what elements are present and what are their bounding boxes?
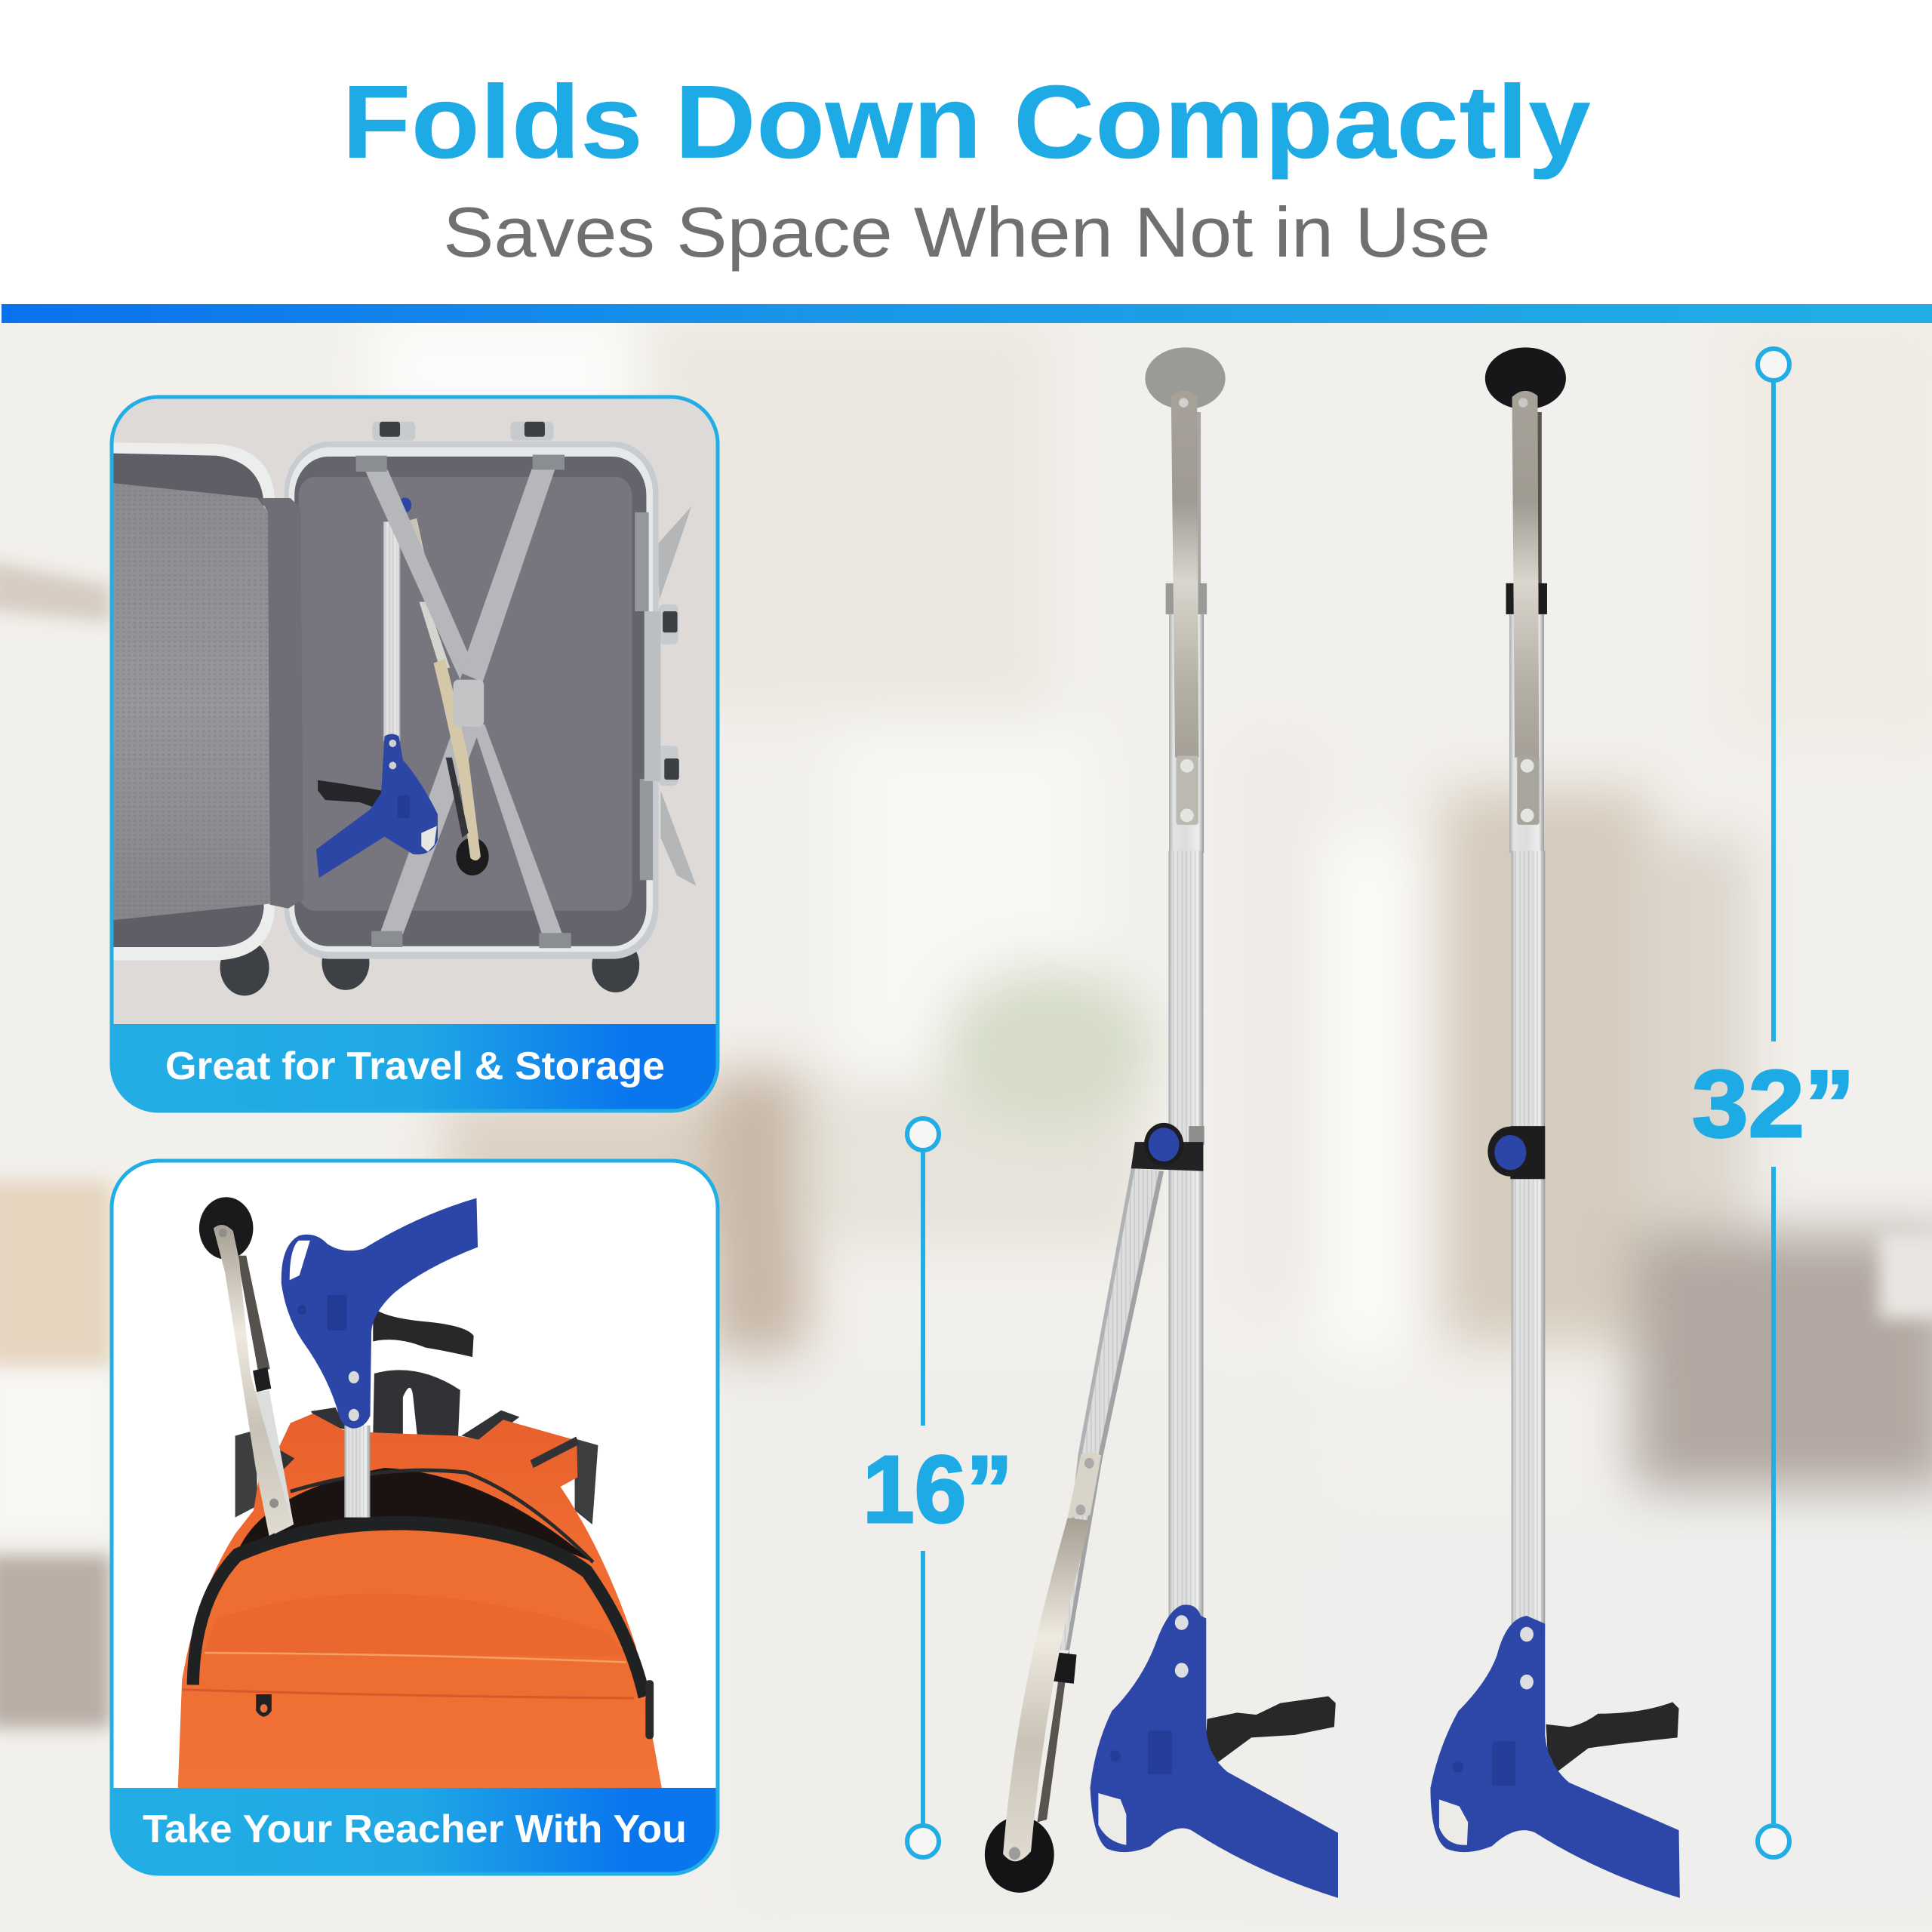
header white area (0, 0, 1932, 305)
folded arm (1057, 1168, 1164, 1651)
icon: suitcase photo (113, 421, 696, 996)
dimension: 16 inches: 16” (863, 1436, 1013, 1543)
panel: travel and storage suitcase (112, 397, 718, 1111)
caption: backpack: Take Your Reacher With You (143, 1807, 687, 1851)
panel: backpack (112, 1161, 718, 1874)
header gradient bar (2, 304, 1932, 323)
dimension: 32 inches (1692, 349, 1855, 1857)
caption band: travel (112, 1024, 718, 1111)
reacher: extended (1430, 347, 1680, 1898)
reacher: folded (985, 347, 1338, 1898)
subtitle: Saves Space When Not in Use (443, 192, 1491, 272)
upper ghosted section: folded arm behind (1145, 347, 1226, 853)
caption: travel: Great for Travel & Storage (165, 1044, 665, 1088)
title: Folds Down Compactly (342, 64, 1591, 180)
dimension: 32 inches: 32” (1692, 1051, 1855, 1157)
dimension: 16 inches (863, 1118, 1013, 1857)
icon: backpack with reacher photo (178, 1197, 662, 1789)
caption band: backpack (112, 1788, 718, 1874)
